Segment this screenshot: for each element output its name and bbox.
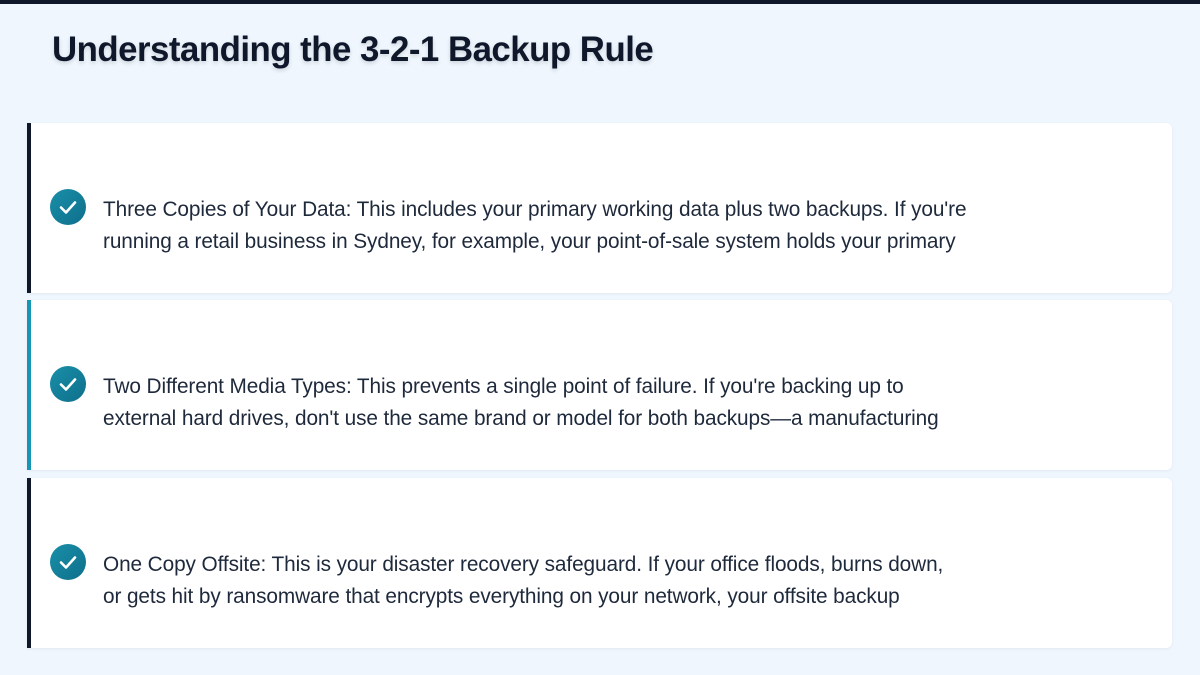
text: offsite: One Copy Offsite: This is your disaster recovery safeguard. If your office floods, burns down, bbox=[103, 553, 943, 576]
panel: two media types bbox=[27, 300, 1172, 470]
text: three copies: Three Copies of Your Data: This includes your primary working data plus two backups. If you're bbox=[103, 198, 966, 221]
icon: check bbox=[50, 366, 86, 402]
icon: check bbox=[50, 189, 86, 225]
text: two media: external hard drives, don't use the same brand or model for both backups—a manufacturing bbox=[103, 407, 939, 430]
text: offsite bbox=[103, 553, 943, 608]
text: three copies: running a retail business in Sydney, for example, your point-of-sale system holds your primary bbox=[103, 230, 956, 253]
text: two media bbox=[103, 375, 939, 430]
title: Understanding the 3-2-1 Backup Rule bbox=[52, 30, 653, 69]
icon: check bbox=[50, 544, 86, 580]
panel: offsite bbox=[27, 478, 1172, 648]
panel: three copies bbox=[27, 123, 1172, 293]
text: offsite: or gets hit by ransomware that encrypts everything on your network, your offsite backup bbox=[103, 585, 900, 608]
text: three copies bbox=[103, 198, 966, 253]
text: two media: Two Different Media Types: This prevents a single point of failure. If you're backing up to bbox=[103, 375, 904, 398]
